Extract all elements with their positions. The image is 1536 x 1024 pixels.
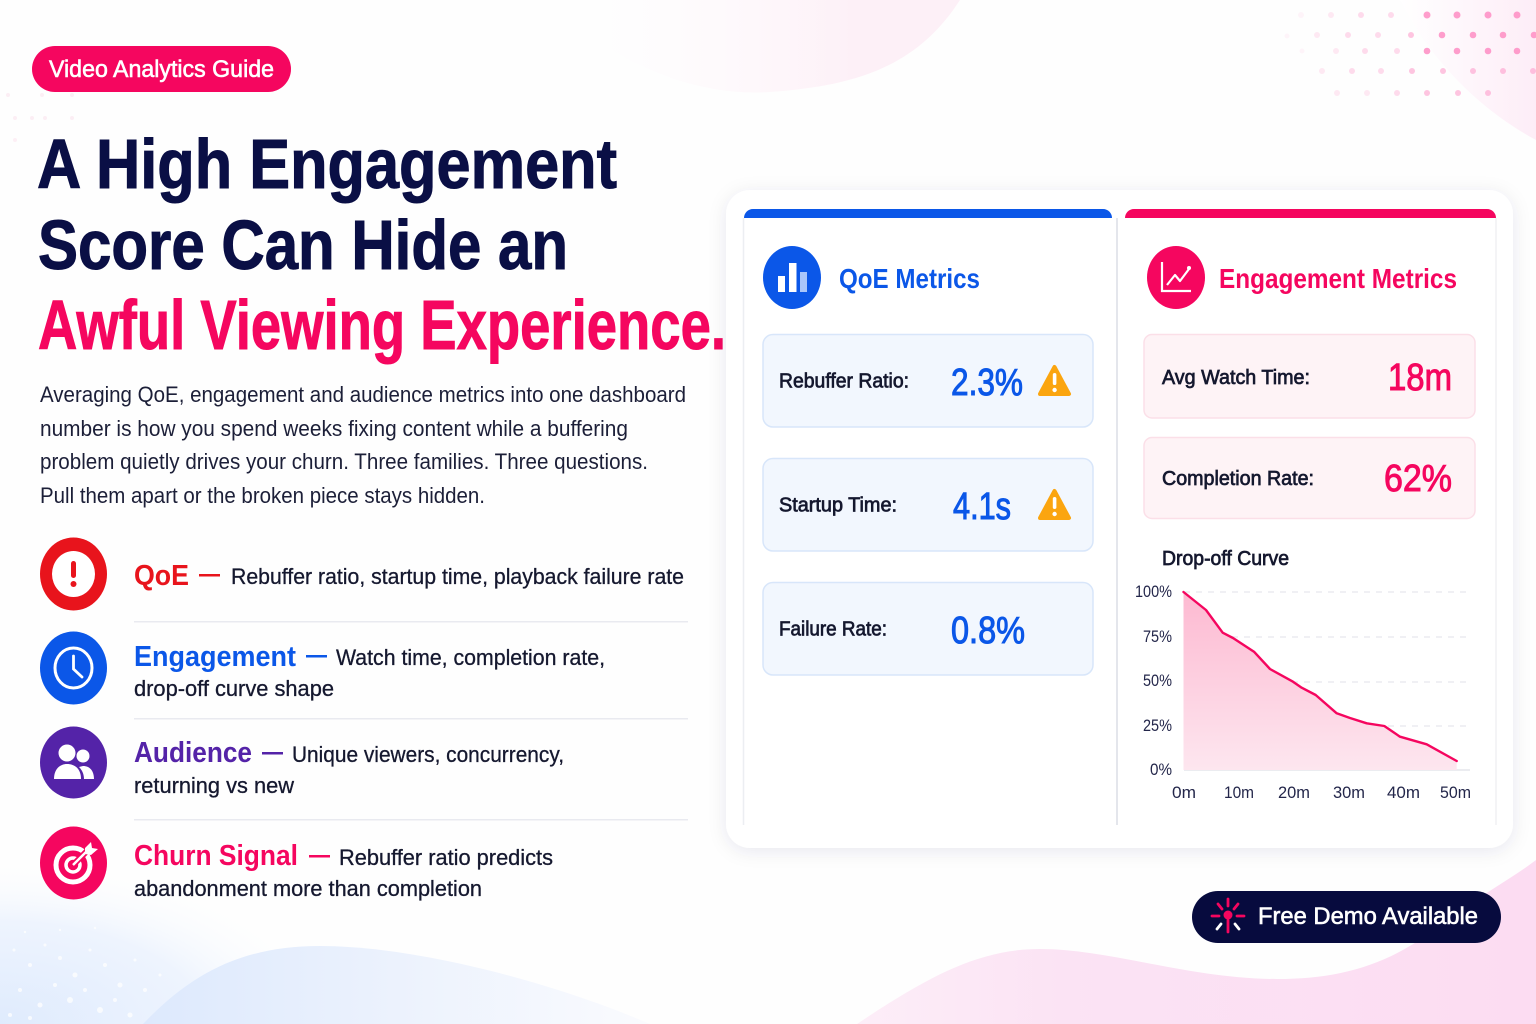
list item: QoE: Rebuffer ratio, startup time, playback failure rate: [231, 564, 684, 589]
intro paragraph: number is how you spend weeks fixing content while a buffering: [40, 416, 628, 441]
metric: Rebuffer Ratio: [763, 334, 1093, 427]
line chart: drop-off curve: 100%: [1135, 582, 1172, 601]
metric: Rebuffer Ratio: 2.3%: [951, 362, 1023, 404]
metric: Completion Rate: [1144, 438, 1475, 518]
title: [37, 125, 726, 364]
chart heading: Drop-off Curve: [1162, 548, 1289, 570]
button: Free Demo Available: [1192, 891, 1501, 943]
panel: QoE Metrics: QoE Metrics: [839, 263, 980, 294]
icon: target: [40, 826, 107, 900]
list item: Engagement: [40, 632, 605, 704]
line chart: drop-off curve: [1135, 582, 1471, 802]
icon: line chart: [1147, 246, 1205, 309]
line chart: drop-off curve: 20m: [1278, 783, 1310, 802]
list item: Churn Signal: Churn Signal: [134, 840, 298, 872]
decorative dot grid: [1284, 12, 1536, 96]
metric: Startup Time: 4.1s: [953, 486, 1011, 528]
line chart: drop-off curve: 75%: [1143, 627, 1172, 646]
icon: bar chart: [763, 246, 821, 309]
metric: Failure Rate: 0.8%: [951, 610, 1025, 652]
metric: Failure Rate: Failure Rate:: [779, 618, 887, 640]
icon: clock: [40, 632, 107, 704]
line chart: drop-off curve: 0%: [1150, 760, 1172, 779]
list item: Churn Signal: [40, 826, 553, 901]
list item: Churn Signal: abandonment more than completion: [134, 876, 482, 901]
list item: Audience: Audience: [134, 737, 252, 769]
button: Free Demo Available: Free Demo Available: [1258, 903, 1478, 930]
dashboard card: [726, 190, 1513, 848]
line chart: drop-off curve: 30m: [1333, 783, 1365, 802]
title: Awful Viewing Experience.: [38, 286, 726, 364]
list item: Audience: returning vs new: [134, 773, 294, 798]
list item: Engagement: Watch time, completion rate,: [336, 645, 605, 670]
list item: QoE: [40, 538, 684, 610]
line chart: drop-off curve: 40m: [1387, 783, 1420, 802]
intro paragraph: [40, 382, 686, 508]
badge: Video Analytics Guide: Video Analytics Guide: [49, 56, 274, 83]
metric: Completion Rate: Completion Rate:: [1162, 468, 1314, 490]
intro paragraph: Averaging QoE, engagement and audience metrics into one dashboard: [40, 382, 686, 407]
intro paragraph: problem quietly drives your churn. Three families. Three questions.: [40, 449, 648, 474]
icon: alert: [40, 538, 107, 610]
metric: Avg Watch Time: 18m: [1388, 357, 1452, 399]
metric: Startup Time: [763, 458, 1093, 551]
panel: Engagement Metrics: [1125, 209, 1496, 825]
metric: Rebuffer Ratio: Rebuffer Ratio:: [779, 370, 909, 392]
title: Score Can Hide an: [38, 206, 568, 284]
list item: QoE: QoE: [134, 560, 189, 592]
line chart: drop-off curve: 25%: [1143, 716, 1172, 735]
metric: Avg Watch Time: [1144, 334, 1475, 418]
list item: Churn Signal: Rebuffer ratio predicts: [339, 845, 553, 870]
metric: Avg Watch Time: Avg Watch Time:: [1162, 367, 1310, 389]
intro paragraph: Pull them apart or the broken piece stays hidden.: [40, 483, 485, 508]
list item: Engagement: Engagement: [134, 641, 296, 673]
metric: Failure Rate: [763, 582, 1093, 675]
line chart: drop-off curve: 10m: [1224, 783, 1254, 802]
list item: Audience: [40, 726, 564, 798]
metric: Startup Time: Startup Time:: [779, 494, 897, 516]
panel: QoE Metrics: [744, 209, 1117, 825]
line chart: drop-off curve: 0m: [1172, 783, 1196, 802]
list item: Audience: Unique viewers, concurrency,: [292, 742, 564, 767]
badge: Video Analytics Guide: [32, 46, 291, 92]
panel: Engagement Metrics: Engagement Metrics: [1219, 263, 1457, 294]
line chart: drop-off curve: 50m: [1440, 783, 1471, 802]
icon: users: [40, 726, 107, 798]
line chart: drop-off curve: 50%: [1143, 671, 1172, 690]
metric: Completion Rate: 62%: [1384, 458, 1452, 500]
icon: spark: [1212, 899, 1244, 932]
list item: Engagement: drop-off curve shape: [134, 676, 334, 701]
title: A High Engagement: [37, 125, 617, 203]
